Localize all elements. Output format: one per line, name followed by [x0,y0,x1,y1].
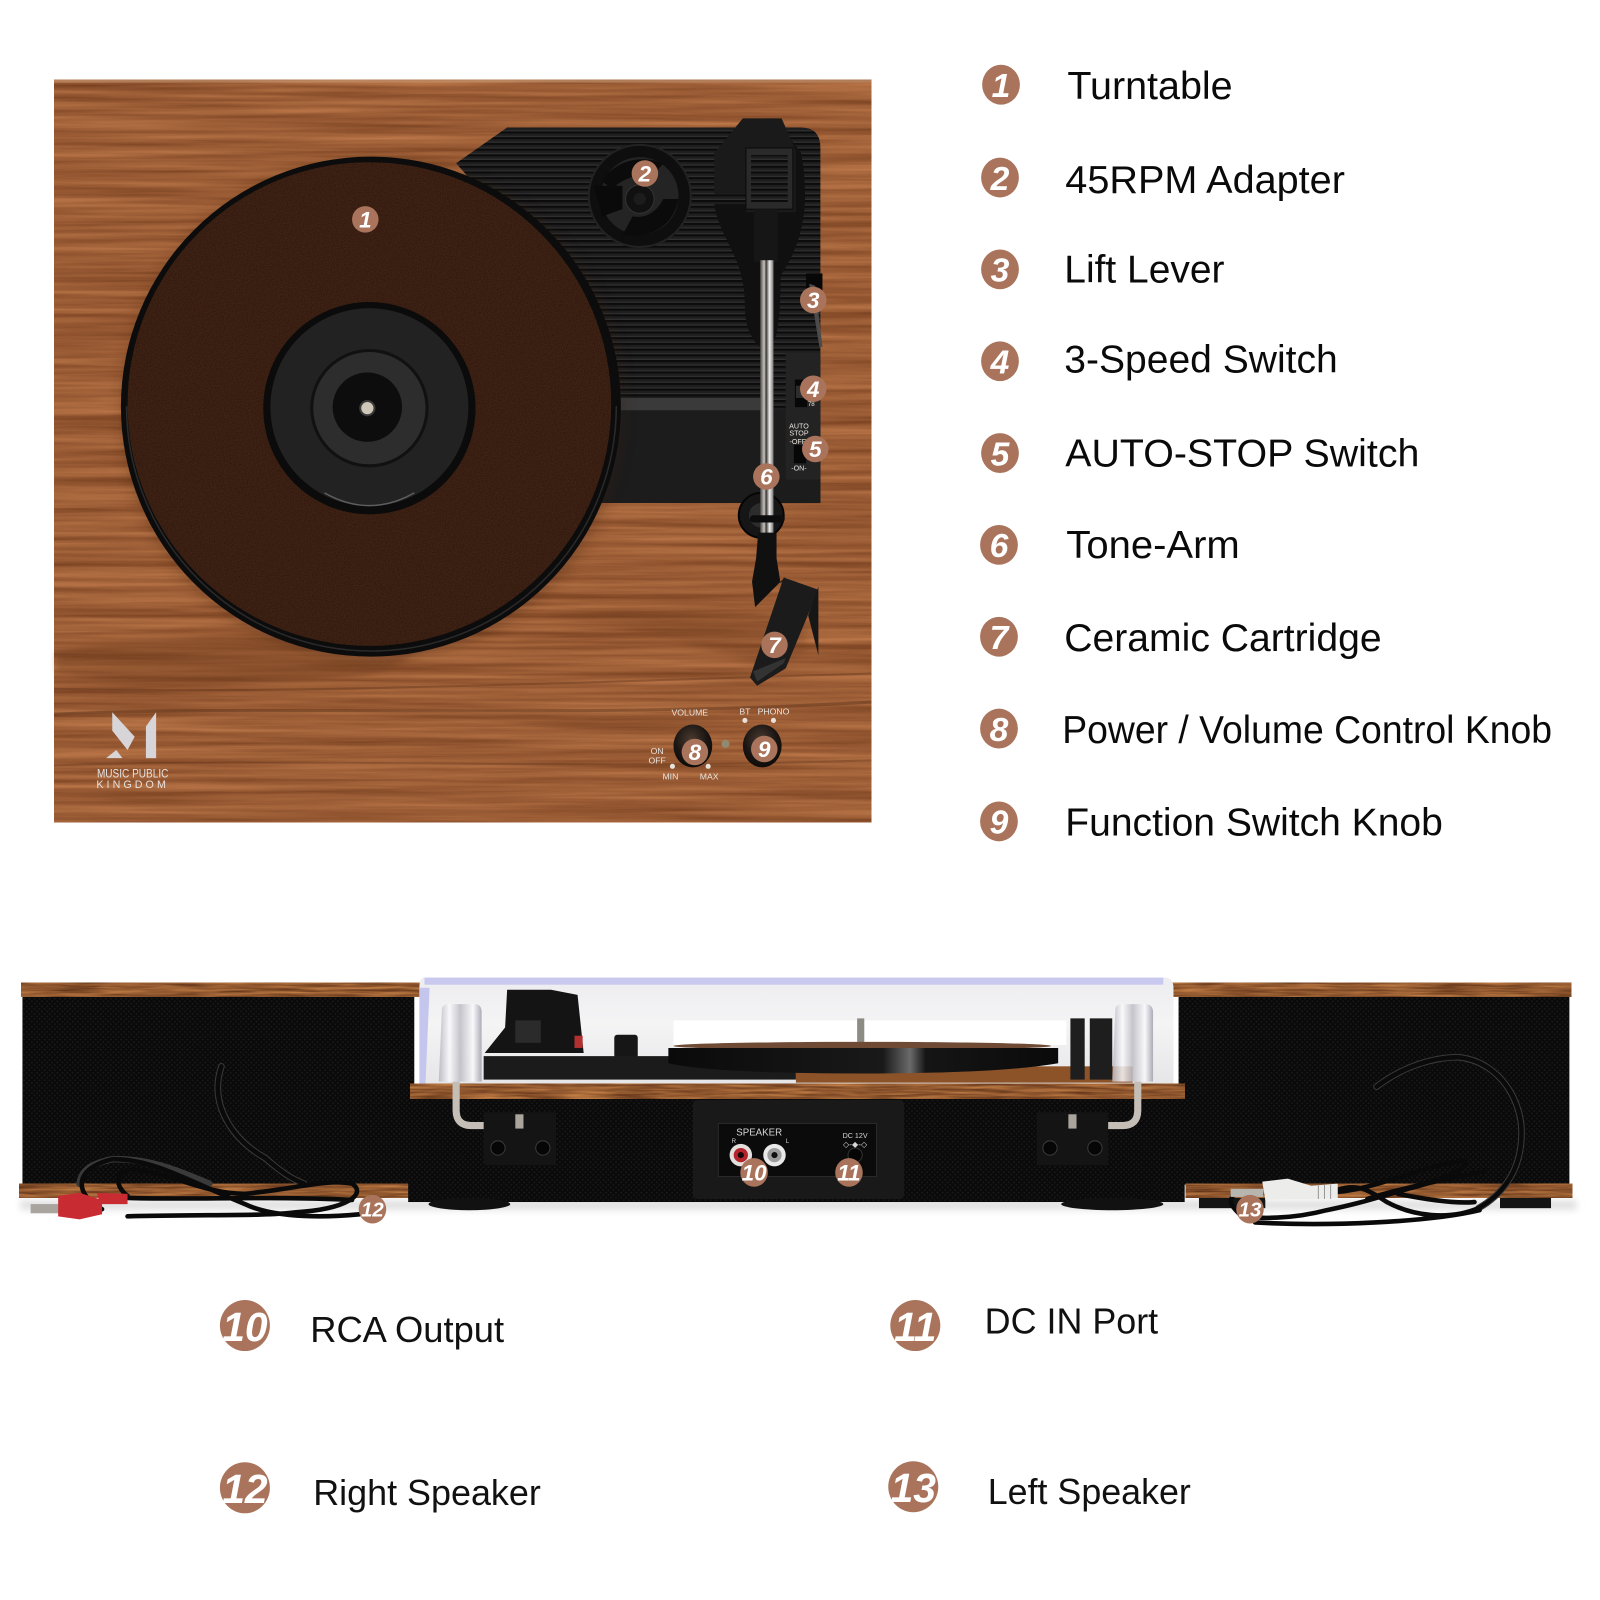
callout badges 1-9: 5 [809,437,822,462]
brand logo [96,712,169,791]
item 8: Power / Volume Control Knob [1062,709,1552,752]
brand logo: KINGDOM [96,779,169,791]
item 3: Lift Lever [1064,249,1224,292]
control knobs: MAX [700,772,719,782]
callout badges 1-9: 1 [359,208,372,233]
item 6: 6 [990,528,1009,565]
RCA sockets [730,1144,786,1166]
function knob [743,724,782,767]
item 6: Tone-Arm [1066,524,1240,567]
arm neck [752,533,786,607]
felt mat [128,162,611,646]
control knobs: OFF [648,755,666,765]
item 4: 4 [990,344,1010,381]
item 10: 10 [222,1304,268,1350]
rear connector panel: R [732,1138,737,1145]
callout badges 10-13: 12 [361,1199,384,1221]
control knobs: BT [739,706,751,716]
ceramic cartridge [750,578,818,686]
left speaker cable [31,1066,359,1219]
callout badges 10-13 [359,1158,1264,1223]
control knobs: PHONO [758,706,790,716]
item 5: 5 [991,436,1011,473]
arm base sweep [714,133,805,349]
left speaker [19,983,420,1198]
control knobs: MIN [662,772,678,782]
volume knob [673,724,712,767]
item 2: 2 [990,161,1010,198]
indicator LED [721,740,730,748]
item 6 [980,524,1240,567]
callout badges 1-9: 2 [638,162,652,187]
left glass hinge [439,1004,482,1082]
panel: top view of turntable [54,80,871,822]
callout badges 1-9: 4 [806,377,820,402]
item 12: Right Speaker [313,1473,541,1513]
lift lever [806,273,822,347]
callout badges 10-13: 13 [1239,1199,1262,1221]
rear connector panel: DC 12V [843,1132,868,1140]
right speaker cable [1231,1057,1522,1224]
item 13: Left Speaker [988,1472,1191,1512]
item 8: 8 [990,712,1009,749]
item 7: 7 [990,620,1011,657]
rear connector panel [693,1100,904,1199]
right hinge and rod [1037,1082,1138,1165]
visible platter and spindle [668,1018,1133,1083]
item 5: AUTO-STOP Switch [1065,432,1419,475]
white RCA plug [1231,1179,1338,1200]
speed and auto-stop switches: -OFF- [789,438,809,446]
right speaker [1171,983,1572,1208]
callout badges 1-9 [352,160,829,765]
rear connector panel: SPEAKER [736,1128,782,1139]
counterweight [714,118,796,212]
item 7: Ceramic Cartridge [1064,617,1382,660]
callout badges 1-9: 8 [689,740,702,765]
item 11: DC IN Port [985,1302,1158,1342]
item 13: 13 [891,1465,936,1511]
dust cover [419,978,1173,1084]
rear connector panel: ◇-◆-◇ [843,1140,868,1149]
left hinge and rod [456,1082,556,1165]
centre body [408,1084,1185,1210]
rear dark blocks [1070,1018,1112,1080]
item 10: RCA Output [310,1310,504,1350]
floor shadow [20,1200,1577,1210]
platter [121,157,623,661]
item 9: 9 [990,805,1009,842]
red RCA plug [31,1193,128,1219]
rear connector panel: L [786,1138,790,1145]
item 3: 3 [991,253,1010,290]
panel: rear view of turntable with speakers [19,978,1577,1224]
45RPM adapter [589,145,691,247]
speed and auto-stop switches: 78 [808,401,815,408]
item 3 [981,249,1224,292]
control knobs [648,706,790,782]
item 11: 11 [894,1304,936,1350]
item 2: 45RPM Adapter [1065,159,1345,202]
speed and auto-stop switches [789,380,815,472]
speed and auto-stop switches: AUTO [789,423,809,431]
brand logo: MUSIC PUBLIC [97,768,169,781]
DC socket [848,1148,862,1162]
callout badges 1-9: 3 [807,288,820,313]
item 9: Function Switch Knob [1065,802,1443,845]
legend: bottom parts list [220,1300,1191,1513]
control knobs: ON [651,746,664,756]
right glass hinge [1112,1004,1153,1082]
callout badges 10-13: 11 [837,1161,861,1186]
item 13 [888,1461,1191,1512]
pivot [739,493,784,538]
speed and auto-stop switches: -ON- [791,464,807,472]
item 4: 3-Speed Switch [1064,338,1338,381]
callout badges 10-13: 10 [742,1161,767,1186]
centre hub [263,302,476,514]
callout badges 1-9: 6 [760,465,773,490]
chrome rod [760,260,773,536]
item 11 [890,1300,1158,1351]
item 1 [982,65,1233,108]
control knobs: VOLUME [672,707,708,717]
speed and auto-stop switches: STOP [789,430,809,438]
legend: top parts list [980,65,1552,845]
item 12 [220,1462,541,1513]
black deck with ribs [456,128,820,503]
item 10 [220,1300,504,1351]
wood plinth [54,80,871,822]
item 1: Turntable [1067,65,1233,108]
tone-arm [714,118,805,607]
callout badges 1-9: 7 [768,633,782,658]
visible tonearm and cartridge [484,990,796,1080]
callout badges 1-9: 9 [758,737,771,762]
item 12: 12 [222,1466,268,1512]
item 1: 1 [992,68,1010,105]
